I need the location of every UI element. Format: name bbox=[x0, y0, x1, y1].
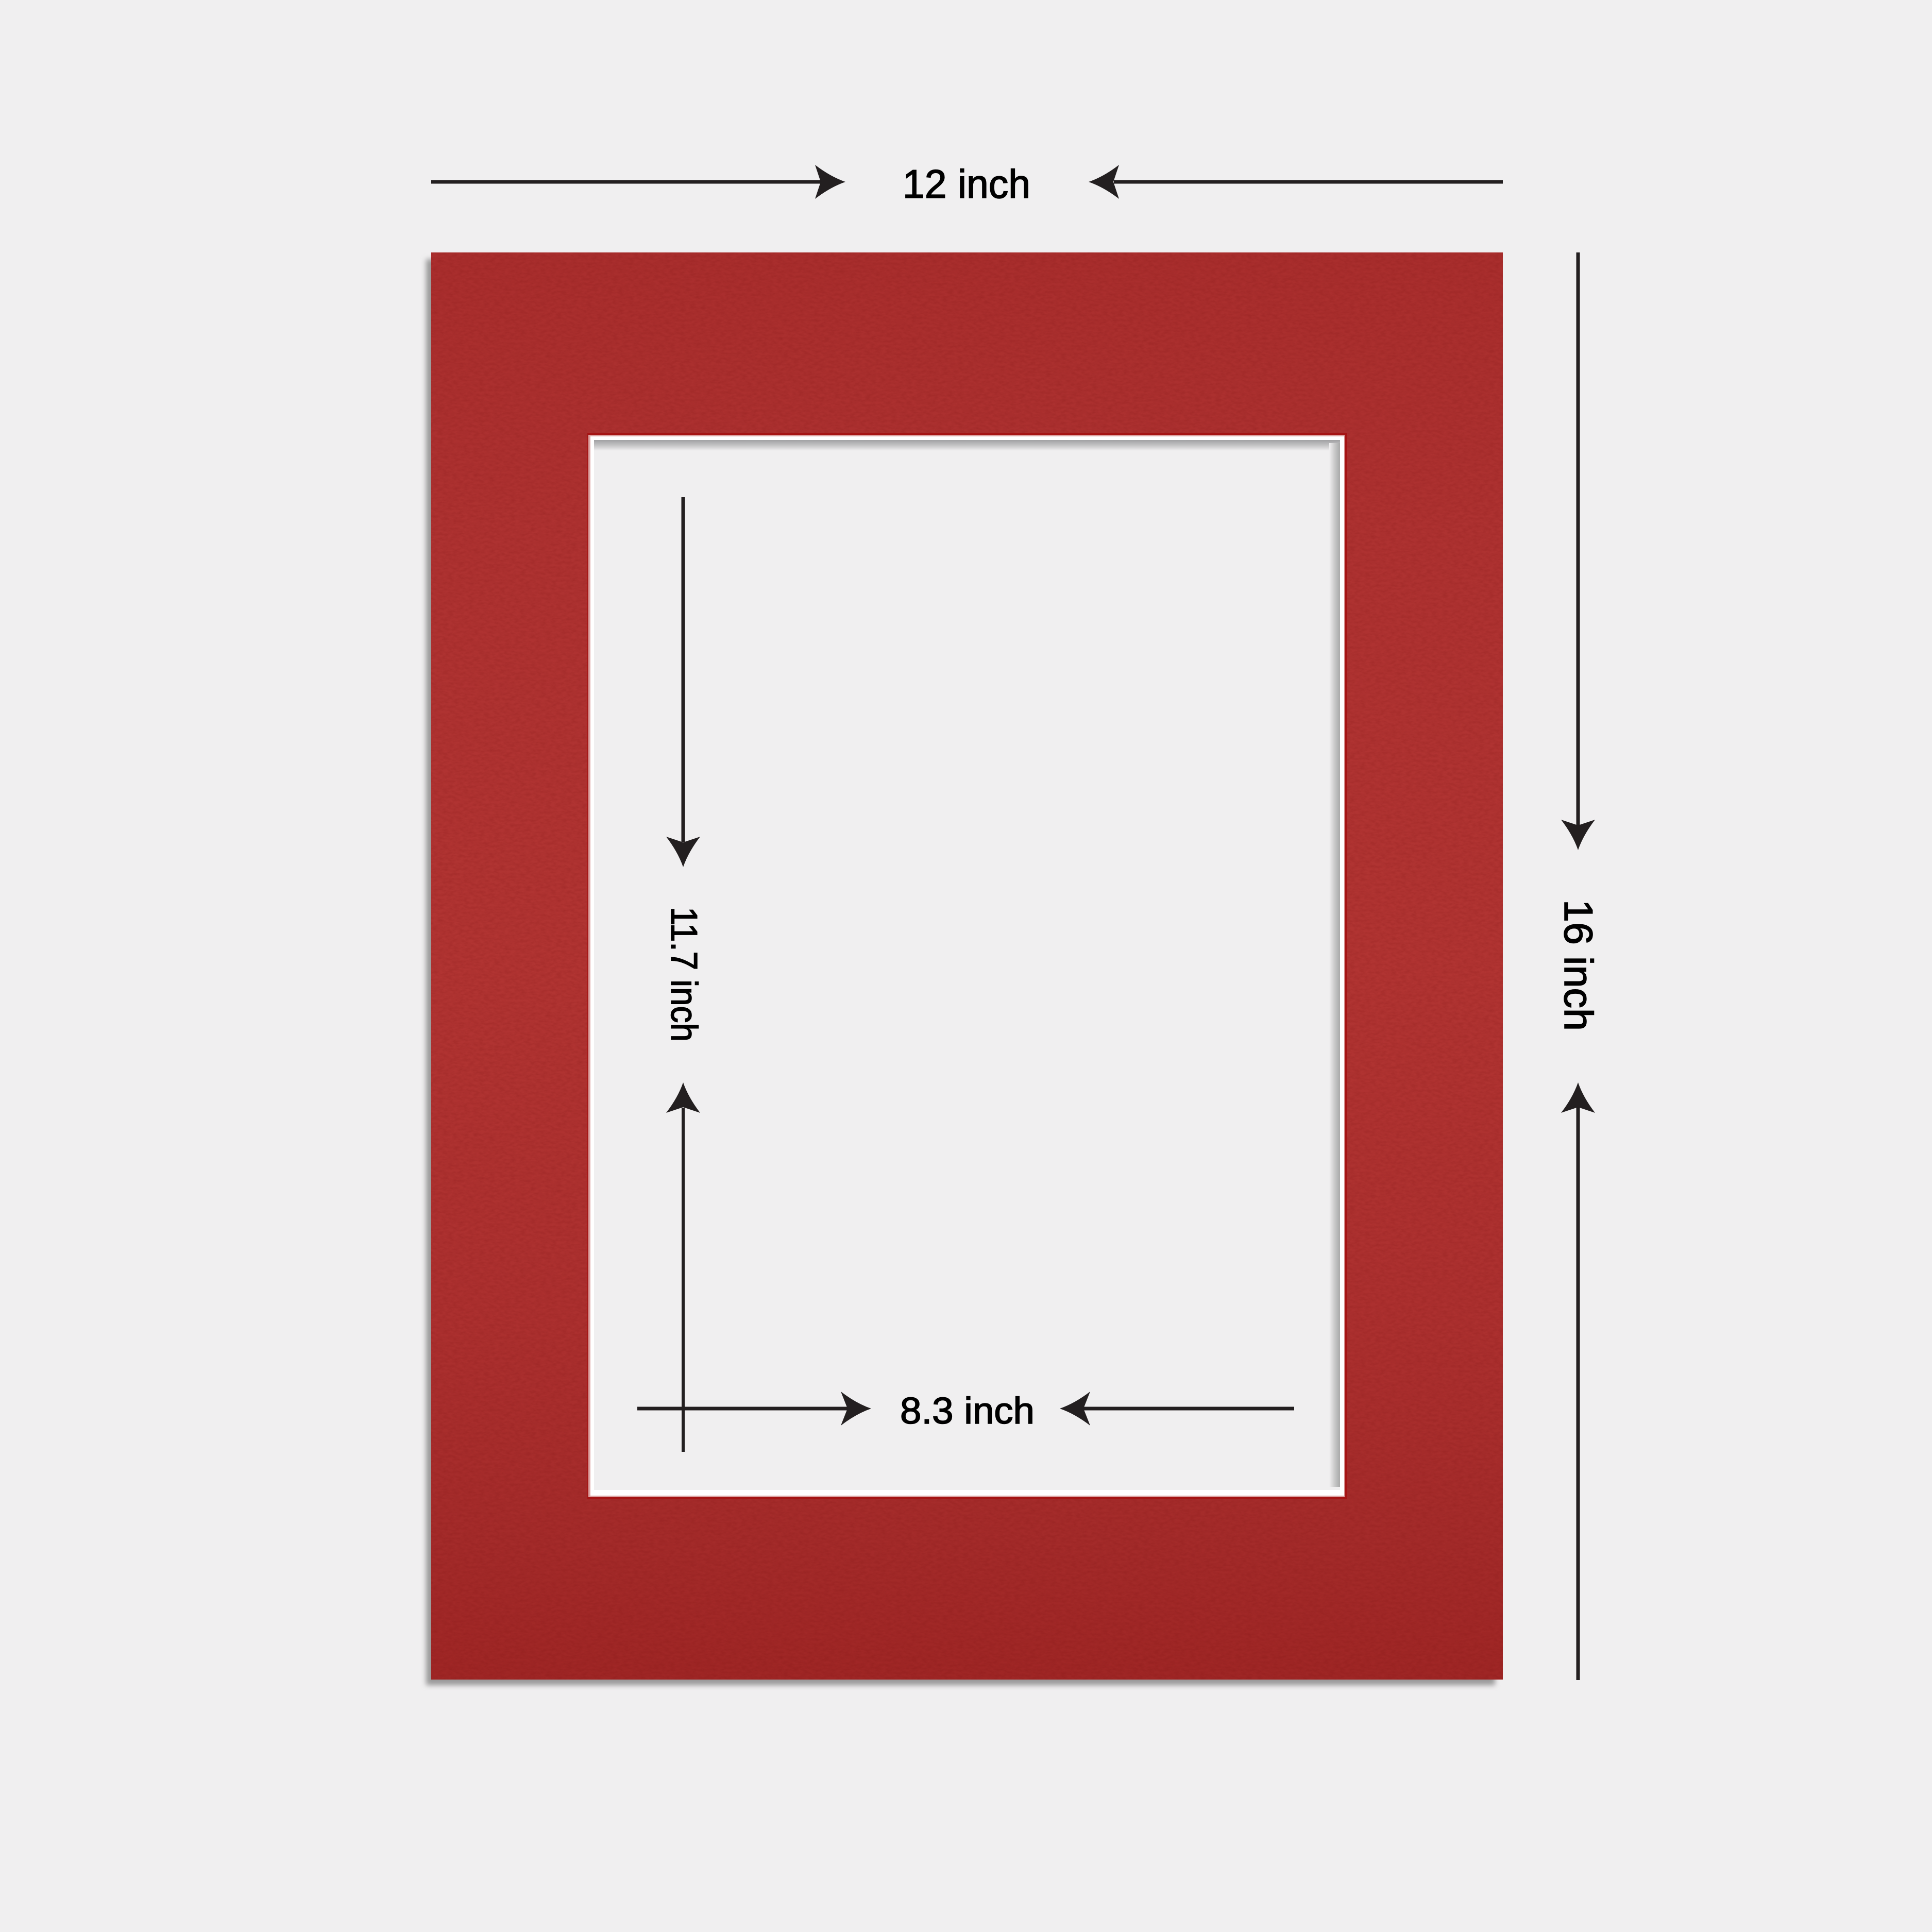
label: window width: 8.3 inch bbox=[900, 1391, 1035, 1432]
mat board drop shadow bbox=[426, 259, 1495, 1685]
arrow: outer height, top bbox=[1561, 252, 1595, 850]
label: outer width: 12 inch bbox=[903, 161, 1030, 207]
window bevel frame bbox=[587, 433, 1347, 1499]
arrow: outer width, right bbox=[1089, 165, 1503, 199]
red mat board with window opening bbox=[431, 252, 1503, 1680]
arrow: outer width, left bbox=[431, 165, 845, 199]
arrow: window width, right bbox=[1060, 1392, 1294, 1426]
arrow: window height, bottom bbox=[666, 1082, 700, 1452]
label: outer height: 16 inch bbox=[1556, 900, 1601, 1031]
arrow: outer height, bottom bbox=[1561, 1082, 1595, 1680]
arrow: window width, left bbox=[637, 1392, 871, 1426]
label: window height: 11.7 inch bbox=[663, 907, 704, 1042]
arrow: window height, top bbox=[666, 497, 700, 867]
